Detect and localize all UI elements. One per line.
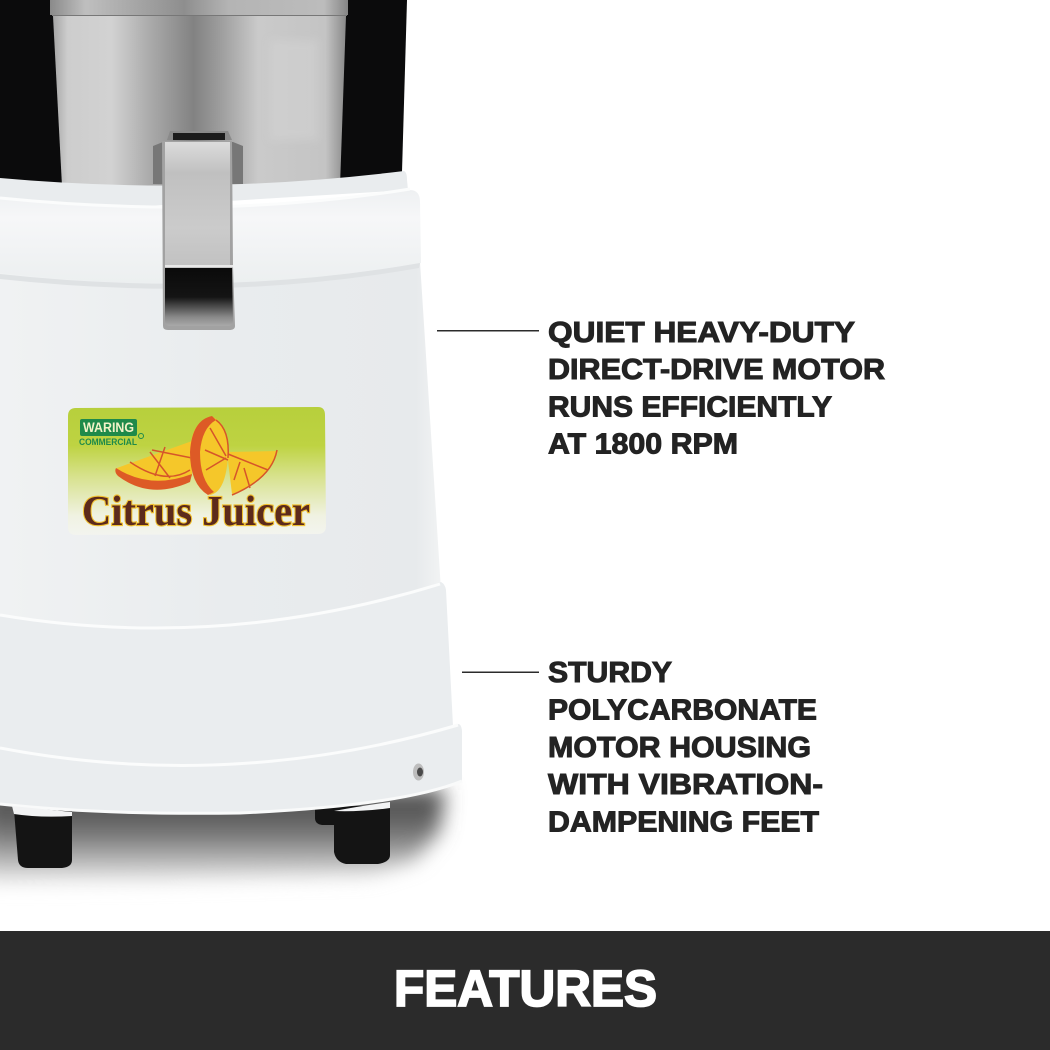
- callout text: housing: MOTOR HOUSING: [548, 732, 811, 764]
- callout text: housing: WITH VIBRATION-: [548, 769, 823, 801]
- callout text: housing: STURDY: [548, 657, 672, 689]
- steel latch and spout: [153, 131, 243, 330]
- middle housing band: [0, 582, 453, 790]
- Waring Commercial logo: WARING: [83, 420, 134, 435]
- product photo: citrus juicer: [0, 0, 462, 882]
- base feet: [14, 806, 390, 868]
- callout text: motor: AT 1800 RPM: [548, 428, 738, 460]
- callout text: housing: POLYCARBONATE: [548, 694, 817, 726]
- lower base ring: [0, 724, 462, 813]
- callout text: motor: DIRECT-DRIVE MOTOR: [548, 354, 885, 386]
- stainless steel bowl: [50, 0, 348, 186]
- callout text: motor: RUNS EFFICIENTLY: [548, 392, 832, 424]
- black back panel: [0, 0, 407, 186]
- orange slices illustration: [115, 416, 278, 495]
- Waring Commercial logo: [79, 419, 144, 448]
- screw: [413, 764, 424, 780]
- lid collar: [0, 171, 421, 289]
- Waring Commercial logo: COMMERCIAL: [79, 437, 137, 448]
- callout text: housing: DAMPENING FEET: [548, 806, 819, 838]
- footer banner: [0, 931, 1050, 1050]
- callout text: motor: [548, 317, 885, 460]
- footer heading: FEATURES: [394, 960, 657, 1017]
- motor housing body: [0, 262, 452, 790]
- product label sticker: [68, 407, 326, 535]
- foot tops: [12, 806, 72, 817]
- callout text: motor: QUIET HEAVY-DUTY: [548, 317, 855, 349]
- callout text: housing: [548, 657, 823, 838]
- callout leader line: motor: [437, 330, 539, 332]
- floor shadow: [0, 790, 445, 882]
- callout leader line: housing: [462, 672, 539, 673]
- label title: Citrus Juicer: [82, 489, 310, 535]
